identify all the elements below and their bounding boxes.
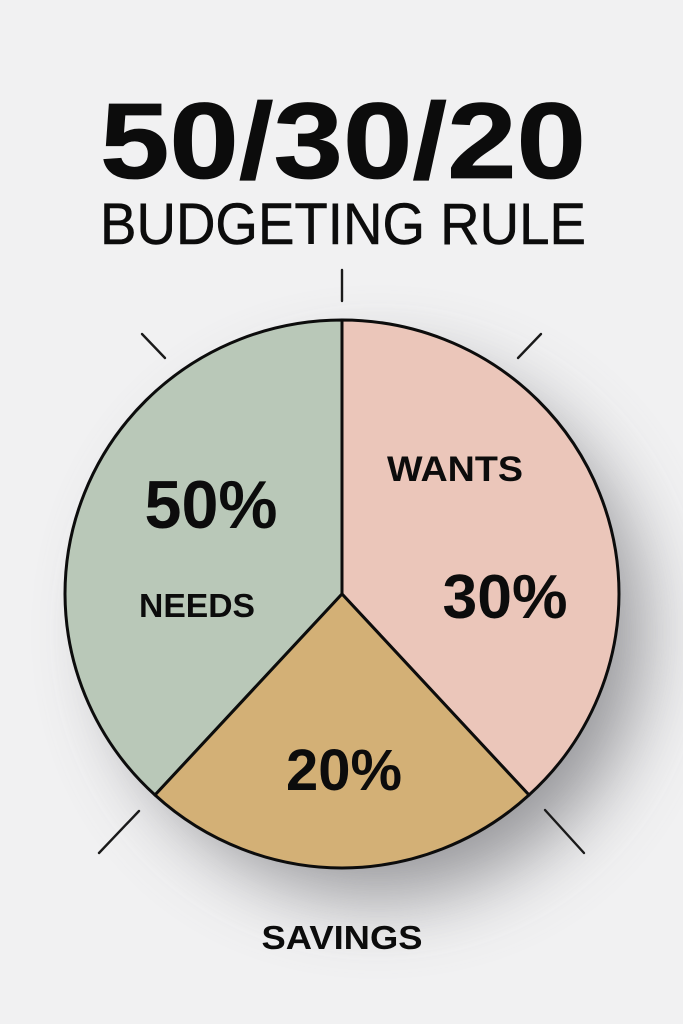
slice: wants 30% <box>342 320 619 795</box>
tick: lower right <box>545 810 584 853</box>
label: 30%: 30% <box>442 563 568 632</box>
label: savings: SAVINGS <box>262 919 422 956</box>
tick: upper right <box>518 334 541 358</box>
slice: needs 50% <box>65 320 342 795</box>
label: 20%: 20% <box>286 738 402 803</box>
label: 50%: 50% <box>144 467 278 543</box>
title <box>100 80 586 257</box>
label: needs: NEEDS <box>139 587 255 624</box>
title: 50/30/20: 50/30/20 <box>100 80 586 201</box>
pie chart <box>65 320 619 868</box>
tick: lower left <box>99 811 139 853</box>
slice: savings 20% <box>155 594 529 868</box>
tick: upper left <box>142 334 165 358</box>
tick: top <box>341 270 343 301</box>
subtitle: budgeting rule: BUDGETING RULE <box>100 192 586 257</box>
tick marks <box>99 270 584 853</box>
pie shadow <box>113 367 643 897</box>
label: wants: WANTS <box>387 450 523 489</box>
